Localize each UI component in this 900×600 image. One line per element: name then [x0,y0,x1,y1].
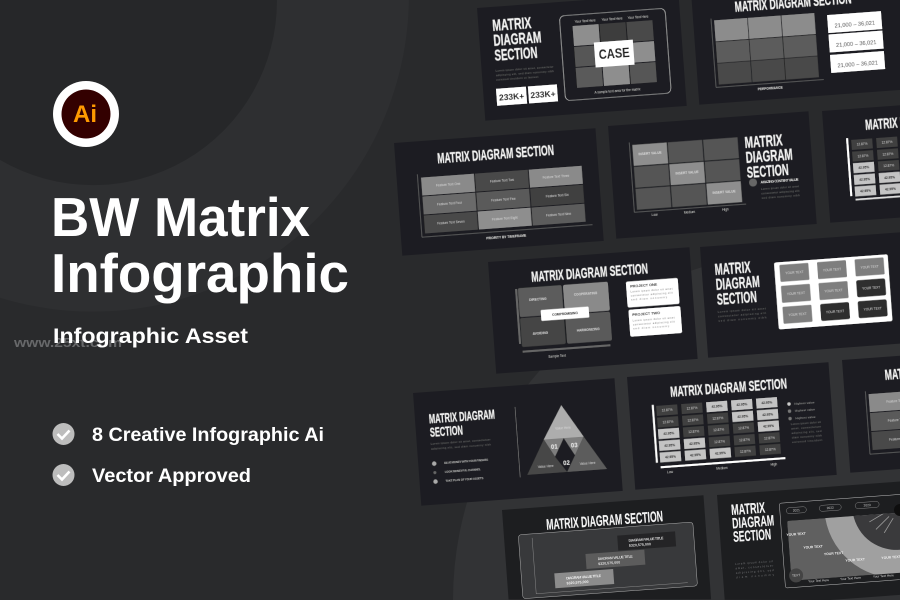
subtitle: Infographic Asset [53,325,248,348]
slide: percentage heat table: Highest value [795,408,815,413]
slide: percentage heat table: 42.95% [761,401,772,405]
background ring: outer circle [0,0,409,312]
slide: pyramid diagram: 02 [563,461,571,467]
slide: pyramid diagram [413,378,623,506]
slide: case matrix: Your Text Here [628,14,649,20]
slide: percentage heat table: 42.95% [736,402,748,407]
slide: radial timeline: Your Text Here [808,578,829,584]
slide: case matrix: CASE [598,44,630,62]
slide: insert value matrix: DIAGRAM [745,147,793,167]
slide: pyramid diagram: Value Here [580,461,596,466]
slide: insert value matrix: sed diam nonummy nibh [762,193,800,200]
slide: insert value matrix: INSERT VALUE [712,189,736,195]
slide: percentage heat table: 12.87% [739,437,750,442]
slide: radial timeline: DIAGRAM [732,512,775,532]
slide: percentage heat table: 42.95% [665,455,676,459]
slide: insert value matrix: Low [652,213,658,217]
slide: compromising quadrant [488,247,698,374]
slide: performance matrix with value cards: PERFORMANCE [758,86,783,91]
slide: case matrix: 233K+ [530,88,556,100]
slide: percentage heat table: 12.87% [740,449,751,454]
slide: pyramid diagram: 03 [571,443,579,450]
slide: performance matrix with value cards: 21,000 – 36,021 [834,21,875,30]
slide: percentage heat table: diam nonummy nibh [792,433,822,440]
slide: feature text matrix: Feature Text Three [542,174,570,180]
slide: feature text matrix [394,128,604,256]
slide: percentage heat table: 12.87% [688,429,699,434]
slide: percentage heat table: High [770,462,777,467]
slide: radial timeline: amet, consectetuer [735,564,774,570]
slide: percentage heat table: 42.95% [664,443,675,448]
feature: vector approved: Vector Approved [92,466,251,487]
slide: pyramid diagram: SECTION [429,422,463,440]
slide: percentage table, cropped: 42.95% [859,177,870,182]
slide: percentage heat table: 12.87% [662,408,673,413]
slide: radial timeline: 2021 [793,508,800,513]
slide: stepped bars: DIAGRAM VALUE TITLE [598,555,633,561]
slide: compromising quadrant: DIRECTING [529,297,547,302]
slide: percentage table, cropped: 12.87% [881,140,893,145]
slide: radial timeline: YOUR TEXT [803,544,824,550]
slide: case matrix: Lorem ipsum dolor sit amet, consectetur [496,65,554,73]
slide: stepped bars: $320,575,000 [598,560,620,566]
slide: radial timeline: SECTION [733,526,772,546]
slide: percentage table, cropped: 12.87% [883,163,894,168]
slide: radial timeline: diam nonummy [736,573,775,579]
feature: 8 creative infographics: 8 Creative Infographic Ai [92,425,324,446]
slide: feature text matrix: Feature Text Seven [437,220,465,226]
slide: radial timeline: adipiscing elit, sed [736,568,774,575]
slide: radial timeline: MATRIX [731,500,766,519]
slide: percentage table, cropped [822,96,900,223]
slide: radial timeline: Lorem ipsum dolor sit [735,559,773,566]
slide: feature text matrix: PRIORITY BY TIMEFRAME [486,234,526,240]
slide: white panel grid: YOUR TEXT [788,312,807,317]
slide: compromising quadrant: consectetur adipiscing elit [631,291,673,298]
slide: radial timeline: YOUR TEXT [824,551,844,556]
slide: feature text matrix: Feature Text Five [491,197,516,203]
feature: vector approved [52,464,251,487]
slide: radial timeline: Your Text Here [840,576,861,581]
slide: white panel grid: DIAGRAM [715,274,760,294]
slide: percentage heat table: 42.95% [763,424,774,429]
slide: white panel grid: YOUR TEXT [826,309,844,314]
slide: stepped bars: $320,575,000 [629,542,651,548]
slide: white panel grid [700,231,900,358]
slide: feature text matrix: MATRIX DIAGRAM SECTION [437,142,555,167]
watermark: www.25xt.com [13,335,122,350]
slide: percentage heat table: Highest value [794,400,815,406]
slide: percentage table, cropped: 42.95% [884,175,895,180]
slide: pyramid diagram: adipiscing elit, sed diam nonummy nibh [431,442,492,451]
slide: case matrix: A sample text area for the matrix [594,87,641,95]
slide: feature text matrix: Feature Text Nine [546,212,572,218]
icon: Adobe Illustrator logo [53,81,119,147]
slide: stepped bars: DIAGRAM VALUE TITLE [628,536,664,543]
slide: pyramid diagram: BLUE MONEY WITH YOUR FINGERS [444,458,488,465]
slide: compromising quadrant: MATRIX DIAGRAM SECTION [531,260,649,286]
slide: compromising quadrant: consectetur adipiscing elit [633,319,675,327]
slide: percentage table, cropped: 12.87% [857,142,868,147]
title: BW Matrix [51,186,310,248]
slide: compromising quadrant: AVOIDING [532,331,549,336]
slide: percentage heat table: 12.87% [687,418,699,423]
slide: case matrix: MATRIX [492,15,532,35]
title [51,186,349,304]
slide: radial timeline: TEXT [792,573,800,578]
slide: insert value matrix: AMAZING CONTENT VALUE [760,178,799,184]
slide: percentage heat table [627,362,837,490]
slide: percentage heat table: Highest value [795,415,816,420]
slide: white panel grid: MATRIX [714,259,752,279]
slide: percentage heat table: amet, consectetuer [791,424,821,431]
slide: percentage heat table: 12.87% [714,439,725,444]
slide: stepped bars: MATRIX DIAGRAM SECTION [546,508,664,534]
slide: percentage heat table: 12.87% [764,436,775,440]
title: Infographic [51,242,349,304]
slide: white panel grid: YOUR TEXT [863,306,882,312]
slide: compromising quadrant: Lorem ipsum dolor sit amet [633,315,675,323]
slide: percentage heat table: euismod tincidunt [792,438,822,444]
slide: pyramid diagram: Lorem ipsum dolor sit amet, consectetuer [431,437,491,446]
slide: case matrix: 233K+ [499,91,525,103]
slide: percentage table, cropped: 42.95% [860,189,871,193]
slide: performance matrix with value cards: 21,000 – 36,021 [836,40,877,49]
slide: percentage heat table: 42.95% [690,453,701,458]
slide: feature text matrix: Feature Text Six [546,193,569,199]
slide: percentage table, cropped: 42.95% [885,187,896,192]
slide: percentage heat table: 42.95% [762,412,773,417]
slide: percentage heat table: MATRIX DIAGRAM SECTION [670,375,788,401]
slide: percentage table, cropped: 42.95% [858,165,869,170]
background ring: inner circle [0,0,277,185]
slide: percentage heat table: Low [667,470,674,474]
background ring: lower right circle [453,253,900,600]
slide: feature text matrix: Feature Text Eight [492,216,518,222]
slide: percentage table, cropped: 12.87% [882,152,894,157]
icon: Adobe Illustrator logo: Ai [73,101,97,128]
slide: radial timeline: 2023 [863,503,871,507]
slide: radial timeline: Your Text Here [873,573,894,579]
slide: pyramid diagram: Value Here [538,464,554,469]
slide: white panel grid: YOUR TEXT [785,270,804,275]
slide: white panel grid: consectetur adipiscing elit [718,311,766,318]
slide: compromising quadrant: Lorem ipsum dolor sit amet [630,287,673,294]
slide: insert value matrix [608,111,817,239]
slide: percentage heat table: 12.87% [662,420,674,424]
slide: percentage heat table: 42.95% [663,431,674,436]
slide: case matrix: Your Text Here [602,16,623,22]
slide: compromising quadrant: COMPROMISING [552,311,578,317]
slide: insert value matrix: Lorem ipsum dolor sit amet [761,184,799,191]
slide: insert value matrix: MATRIX [744,132,783,152]
slide: feature text matrix: Feature Text Two [490,178,515,184]
slide: insert value matrix: consectetur adipiscing elit [761,189,800,195]
slide: case matrix: adipiscing elit, sed diam nonummy nibh [496,69,554,77]
slide: case matrix: DIAGRAM [493,29,542,50]
slide: performance matrix with value cards [691,0,900,105]
slide: radial timeline: 2022 [827,506,834,510]
slide: white panel grid: YOUR TEXT [787,291,805,296]
slide: stepped bars: DIAGRAM VALUE TITLE [566,574,602,580]
slide: insert value matrix: High [722,207,729,212]
slide: white panel grid: YOUR TEXT [823,267,841,273]
slide: pyramid diagram: TAKE PLAN OF YOUR ASSETS [445,476,484,483]
slide: performance matrix with value cards: 21,000 – 36,021 [837,61,878,69]
slide: case matrix [477,0,687,121]
slide: white panel grid: sed diam nonummy nibh [718,315,767,323]
slide: feature text matrix: Feature Text One [436,182,461,188]
slide: compromising quadrant: Sample Text [548,354,566,359]
slide: stepped bars: $320,575,000 [566,580,589,585]
slide: pyramid diagram: Value Here [555,426,571,431]
slide: percentage heat table: 42.95% [737,414,748,419]
slide: compromising quadrant: sed diam nonummy [631,295,668,302]
black dot at right edge [894,504,900,516]
slide: feature text matrix: Feature Text Four [437,201,463,207]
slide: percentage table, cropped: 12.87% [857,154,869,158]
slide: feature text matrix, cropped [842,345,900,473]
slide: percentage heat table: 42.95% [711,404,723,409]
slide: white panel grid: YOUR TEXT [860,264,879,270]
slide: radial timeline: YOUR TEXT [845,557,866,563]
slide: percentage heat table: 12.87% [738,426,749,431]
slide: white panel grid: YOUR TEXT [824,288,843,293]
slide: case matrix: SECTION [494,45,538,65]
slide: percentage heat table: Lorem ipsum dolor sit [791,420,821,426]
slide: insert value matrix: SECTION [746,162,789,182]
slide: pyramid diagram: LOOK MONEYFUL CHANNEL [445,467,481,474]
slide: percentage heat table: 42.95% [715,451,726,456]
slide: compromising quadrant: sed diam nonummy [633,324,670,331]
slide: compromising quadrant: PROJECT ONE [630,283,658,289]
slide: percentage heat table: 12.87% [712,416,723,421]
slide: percentage heat table: Medium [716,466,728,471]
slide: insert value matrix: INSERT VALUE [675,170,699,176]
slide: pyramid diagram: 01 [551,445,559,451]
slide: radial timeline [717,482,900,600]
slide: white panel grid: YOUR TEXT [862,285,880,291]
slide: percentage heat table: 12.87% [765,447,776,452]
slide: case matrix: euismod tincidunt ut laoreet [496,75,539,82]
slide: compromising quadrant: COOPERATING [574,291,598,297]
slide: percentage heat table: 12.87% [713,428,724,432]
slide: percentage heat table: adipiscing elit, sed [791,429,822,435]
slide: compromising quadrant: HARMONIZING [577,327,600,333]
slide: pyramid diagram: MATRIX DIAGRAM [428,406,495,426]
slide: radial timeline: YOUR TEXT [786,532,807,537]
slide: insert value matrix: INSERT VALUE [638,151,662,156]
slide: case matrix: Your Text Here [575,18,596,24]
slide: white panel grid: SECTION [716,289,757,309]
slide: compromising quadrant: PROJECT TWO [632,311,660,317]
slide: percentage heat table: 12.87% [686,406,698,411]
slide: stepped bars [502,495,711,600]
slide: percentage heat table: 42.95% [689,441,700,446]
slide: white panel grid: Lorem ipsum dolor sit amet [718,306,766,314]
slide: insert value matrix: Medium [684,210,696,215]
